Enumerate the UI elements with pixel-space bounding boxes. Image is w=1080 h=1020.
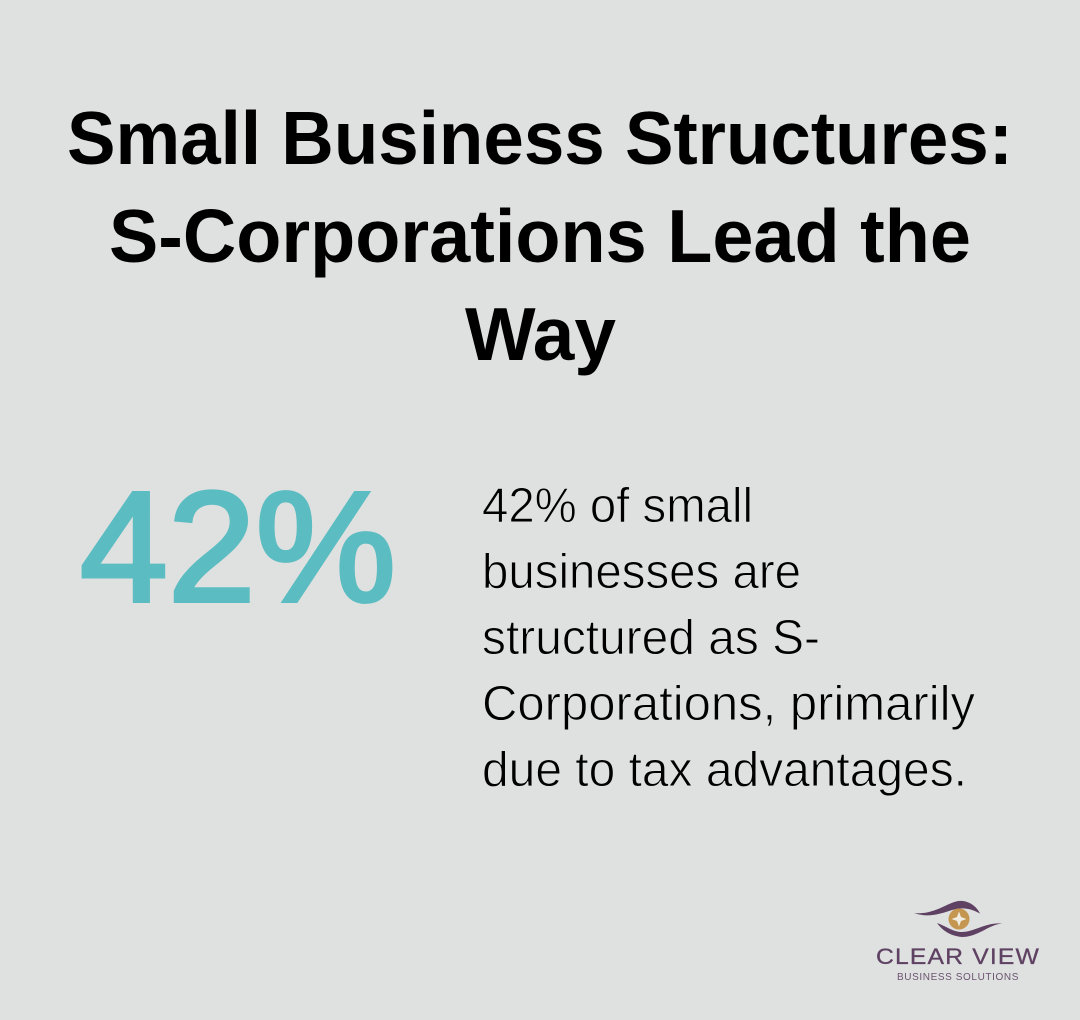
description text: 42% of small — [482, 478, 753, 533]
icon: eye with star — [914, 901, 1002, 937]
logo: Clear View Business Solutions — [876, 901, 1040, 983]
title: Way — [465, 292, 616, 376]
description text: structured as S- — [482, 610, 820, 665]
big statistic: 42%: 42% — [80, 460, 396, 635]
logo wordmark: CLEAR VIEW — [876, 944, 1040, 969]
description text — [482, 478, 975, 797]
title — [67, 96, 1013, 376]
title: Small Business Structures: — [67, 96, 1013, 180]
logo tagline: BUSINESS SOLUTIONS — [897, 972, 1019, 983]
description text: due to tax advantages. — [482, 742, 967, 797]
description text: Corporations, primarily — [482, 676, 975, 731]
description text: businesses are — [482, 544, 801, 599]
title: S-Corporations Lead the — [109, 194, 971, 278]
